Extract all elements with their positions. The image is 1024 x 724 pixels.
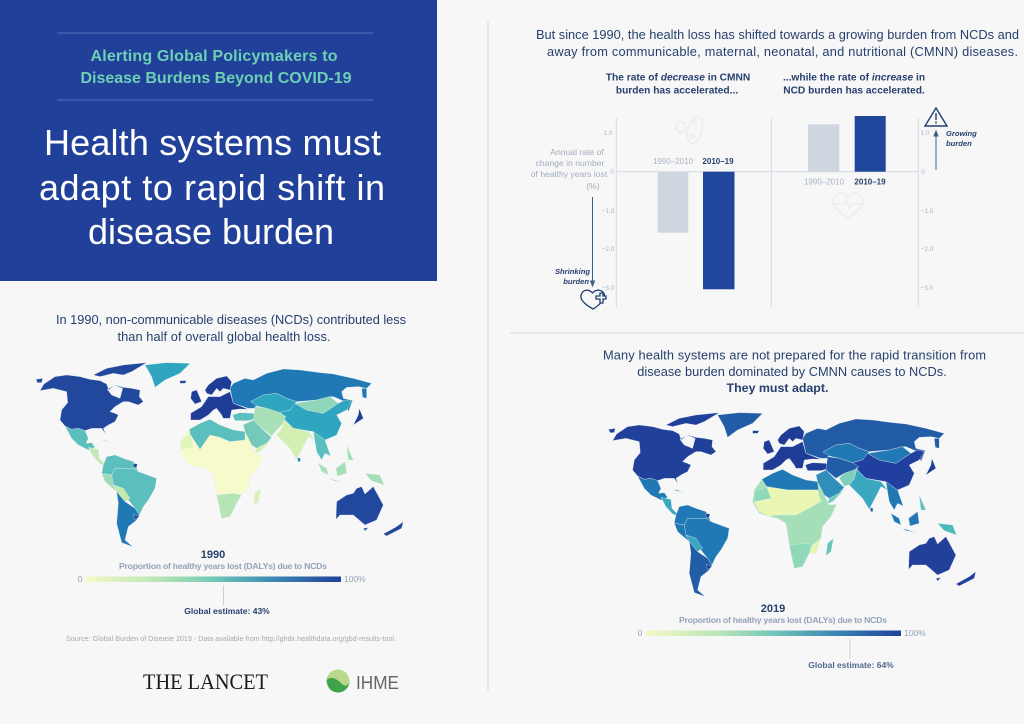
chart heading: CMNN — [606, 72, 750, 96]
source: Source: Global Burden of Disease 2019 - Data available from http://ghdx.healthdata.org/gbd-results-tool. — [66, 635, 396, 643]
title: disease burden — [88, 211, 334, 252]
axis title: Annual rate of — [550, 147, 604, 157]
axis ticks: −3.0 — [921, 285, 934, 292]
label: growing: burden — [946, 139, 972, 148]
label: growing — [946, 129, 977, 148]
arrow: shrinking — [590, 197, 594, 286]
global estimate: Global estimate: 43% — [184, 606, 270, 616]
axis ticks: −3.0 — [602, 285, 615, 292]
bar labels: 1990–2010 — [804, 178, 845, 186]
map: 1990 — [36, 363, 403, 547]
text: shift intro: But since 1990, the health loss has shifted towards a growing burden from NCDs and — [536, 27, 1019, 42]
icon: heart plus — [581, 290, 606, 309]
text: adapt — [603, 348, 986, 395]
colour scale — [638, 628, 926, 638]
legend: 1990 — [78, 549, 366, 616]
bar labels: 2010–19 — [854, 178, 886, 186]
colour scale — [78, 574, 366, 584]
title: Health systems must — [44, 122, 381, 163]
chart heading: CMNN: The rate of decrease in CMNN — [606, 72, 750, 84]
axis ticks: 1.0 — [603, 130, 613, 137]
colour scale: 100% — [904, 628, 926, 638]
bar labels: 2010–19 — [702, 157, 734, 166]
colour scale: 0 — [638, 628, 643, 638]
label: shrinking: burden — [563, 277, 589, 286]
label: growing: Growing — [946, 129, 977, 138]
axis ticks: 0 — [921, 169, 925, 176]
axis title: (%) — [586, 181, 600, 191]
icon: germ — [676, 115, 705, 145]
title: adapt to rapid shift in — [39, 167, 385, 208]
text: shift intro: away from communicable, maternal, neonatal, and nutritional (CMNN) diseases. — [547, 44, 1018, 59]
divider — [487, 22, 489, 690]
bar labels: 1990–2010 — [653, 157, 694, 166]
axis title: of healthy years lost — [531, 169, 608, 179]
axis ticks: −1.0 — [602, 208, 615, 215]
bars: CMNN — [658, 172, 734, 289]
label: shrinking: Shrinking — [555, 267, 590, 276]
text: 1990 intro: than half of overall global health loss. — [118, 329, 330, 344]
subheading: Alerting Global Policymakers to — [90, 48, 338, 65]
axis ticks: −2.0 — [602, 246, 615, 253]
bar labels — [653, 157, 886, 186]
text: 1990 intro — [56, 312, 406, 344]
axis title — [531, 147, 608, 191]
axis title: change in number — [536, 158, 605, 168]
bar chart — [602, 116, 934, 307]
text: adapt: They must adapt. — [727, 381, 828, 395]
year label: 2019 — [761, 603, 785, 615]
map: 2019 — [609, 413, 976, 597]
text: shift intro — [536, 27, 1019, 59]
chart heading: NCD: ...while the rate of increase in — [783, 72, 925, 84]
legend title: Proportion of healthy years lost (DALYs) due to NCDs — [679, 615, 887, 625]
colour scale: 0 — [78, 574, 83, 584]
text: adapt: Many health systems are not prepared for the rapid transition from — [603, 348, 986, 362]
subheading — [80, 48, 352, 87]
bars: NCD — [808, 116, 886, 172]
label: shrinking — [555, 267, 590, 286]
icon: warning — [925, 108, 947, 126]
subheading: Disease Burdens Beyond COVID-19 — [80, 70, 352, 87]
global estimate — [808, 639, 894, 670]
axis ticks: 0 — [610, 169, 614, 176]
colour scale: 100% — [344, 574, 366, 584]
logo: IHME: IHME — [356, 673, 399, 693]
chart heading: NCD: NCD burden has accelerated. — [783, 86, 925, 96]
logo: The Lancet: THE LANCET — [143, 669, 269, 694]
global estimate: Global estimate: 64% — [808, 660, 894, 670]
arrow: growing — [934, 131, 938, 170]
logo: IHME — [326, 670, 399, 693]
axis ticks: 1.0 — [920, 130, 930, 137]
text: 1990 intro: In 1990, non-communicable diseases (NCDs) contributed less — [56, 312, 406, 327]
title — [39, 122, 385, 252]
axis ticks: −2.0 — [921, 246, 934, 253]
legend title: Proportion of healthy years lost (DALYs) due to NCDs — [119, 561, 327, 571]
global estimate — [184, 585, 270, 616]
legend: 2019 — [638, 603, 926, 670]
icon: heart — [833, 193, 863, 218]
header panel — [0, 0, 437, 281]
chart heading: NCD — [783, 72, 925, 96]
axis ticks: −1.0 — [921, 208, 934, 215]
text: adapt: disease burden dominated by CMNN causes to NCDs. — [637, 364, 947, 379]
chart heading: CMNN: burden has accelerated... — [616, 86, 738, 96]
axis ticks — [602, 130, 934, 292]
year label: 1990 — [201, 549, 225, 561]
